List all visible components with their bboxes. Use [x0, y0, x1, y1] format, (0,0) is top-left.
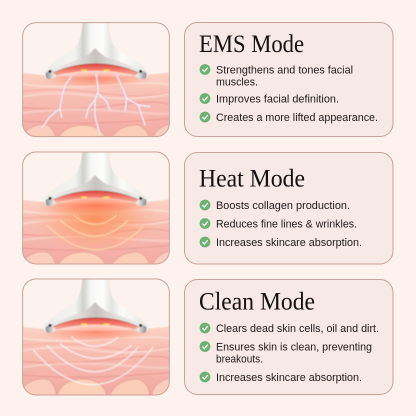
panel: Clean Mode text	[184, 280, 393, 394]
list: Clean benefits	[200, 323, 379, 384]
panel: EMS Mode text	[184, 22, 393, 136]
list: EMS benefits: Improves facial definition.	[216, 94, 339, 106]
lightning bolts	[42, 73, 150, 135]
heat glow	[40, 197, 151, 248]
list: Clean benefits: Ensures skin is clean, preventing	[216, 342, 372, 354]
icon: device over skin	[44, 23, 148, 88]
list: EMS benefits	[200, 64, 378, 124]
list: Clean benefits: Increases skincare absorption.	[216, 372, 362, 384]
list: Clean benefits: Clears dead skin cells, oil and dirt.	[216, 323, 379, 335]
list: Clean benefits: breakouts.	[216, 354, 263, 366]
icon: device over skin	[44, 152, 148, 212]
icon: device over skin	[44, 280, 148, 342]
heading: Heat Mode: Heat Mode	[199, 166, 305, 192]
list: EMS benefits: muscles.	[216, 76, 258, 88]
heading: Clean Mode: Clean Mode	[199, 288, 315, 316]
panel: Heat illustration	[22, 152, 170, 264]
heading: EMS Mode: EMS Mode	[199, 31, 304, 58]
list: EMS benefits: Strengthens and tones facial	[216, 64, 353, 76]
panel: EMS illustration	[22, 22, 170, 138]
panel: Clean illustration	[22, 278, 170, 396]
panel: Heat Mode text	[184, 152, 393, 264]
list: Heat benefits: Reduces fine lines & wrinkles.	[216, 218, 357, 230]
list: Heat benefits: Increases skincare absorption.	[216, 237, 362, 249]
heat waves	[47, 215, 143, 250]
list: Heat benefits	[200, 200, 362, 249]
list: Heat benefits: Boosts collagen production.	[216, 200, 350, 212]
list: EMS benefits: Creates a more lifted appearance.	[216, 112, 378, 124]
lightning glow	[42, 73, 150, 135]
cleaning waves	[33, 337, 153, 385]
